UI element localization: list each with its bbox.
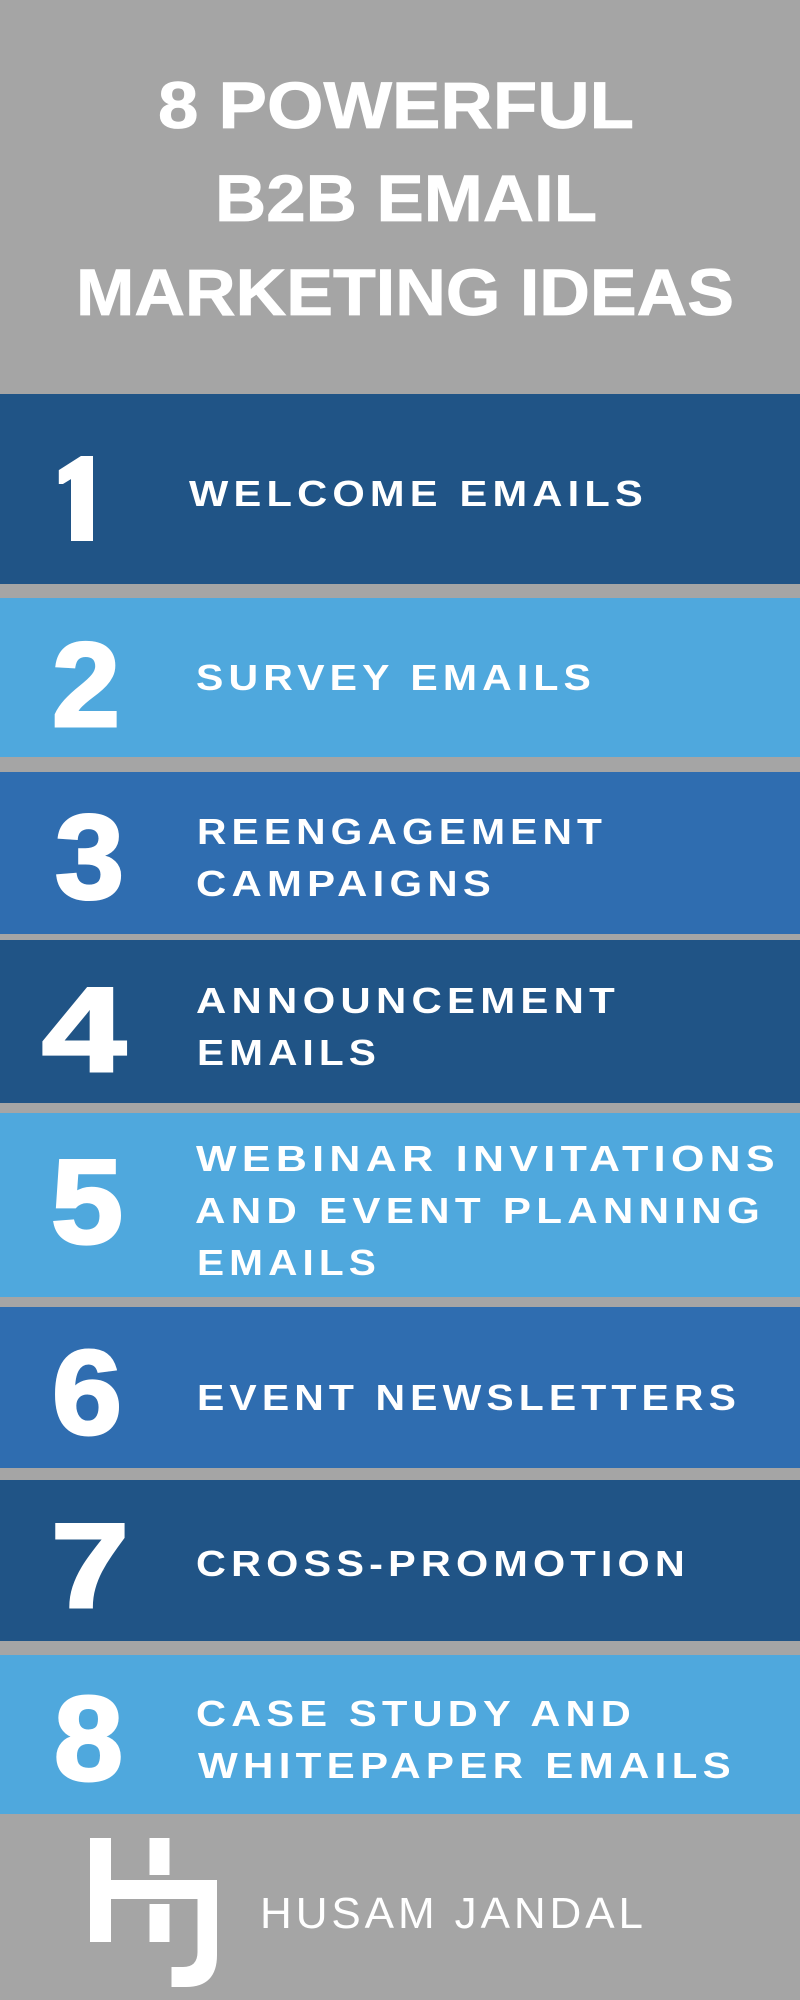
label: webinar invitations and event planning emails [195,1138,780,1283]
label: announcement emails: EMAILS [197,1032,381,1073]
number 6: 6 [52,1326,122,1460]
panel: idea 1 [0,394,800,584]
panel: idea 4 [0,940,800,1103]
label: reengagement campaigns [196,811,607,904]
panel: idea 8 [0,1655,800,1814]
label: reengagement campaigns: REENGAGEMENT [197,811,607,852]
label: cross-promotion: CROSS-PROMOTION [196,1543,690,1584]
number 3: 3 [55,790,124,924]
number 1 [58,456,93,541]
label: case study and whitepaper emails: CASE STUDY AND [196,1693,636,1734]
panel: idea 5 [0,1113,800,1297]
title: 8 POWERFUL [158,68,634,142]
label: webinar invitations and event planning emails: EMAILS [197,1242,381,1283]
label: event newsletters: EVENT NEWSLETTERS [197,1377,741,1418]
number 2: 2 [52,618,120,752]
label: announcement emails [196,980,620,1073]
label: case study and whitepaper emails [196,1693,736,1786]
panel: idea 2 [0,598,800,757]
number 8: 8 [54,1672,123,1806]
title [76,68,734,329]
label: case study and whitepaper emails: WHITEPAPER EMAILS [198,1745,736,1786]
brand name: HUSAM JANDAL [260,1889,643,1938]
title: MARKETING IDEAS [76,255,734,329]
label: welcome emails: WELCOME EMAILS [189,473,648,514]
number 4: 4 [42,963,126,1097]
number 1: 1 [52,432,120,566]
number 7: 7 [51,1499,129,1633]
title: B2B EMAIL [215,161,597,235]
label: announcement emails: ANNOUNCEMENT [196,980,620,1021]
label: reengagement campaigns: CAMPAIGNS [196,863,496,904]
panel: idea 7 [0,1480,800,1641]
panel: idea 6 [0,1307,800,1468]
label: webinar invitations and event planning emails: WEBINAR INVITATIONS [196,1138,780,1179]
number 5: 5 [51,1135,123,1269]
label: webinar invitations and event planning emails: AND EVENT PLANNING [195,1190,765,1231]
logo: HJ monogram [90,1838,217,1987]
panel: idea 3 [0,772,800,934]
label: survey emails: SURVEY EMAILS [196,657,596,698]
